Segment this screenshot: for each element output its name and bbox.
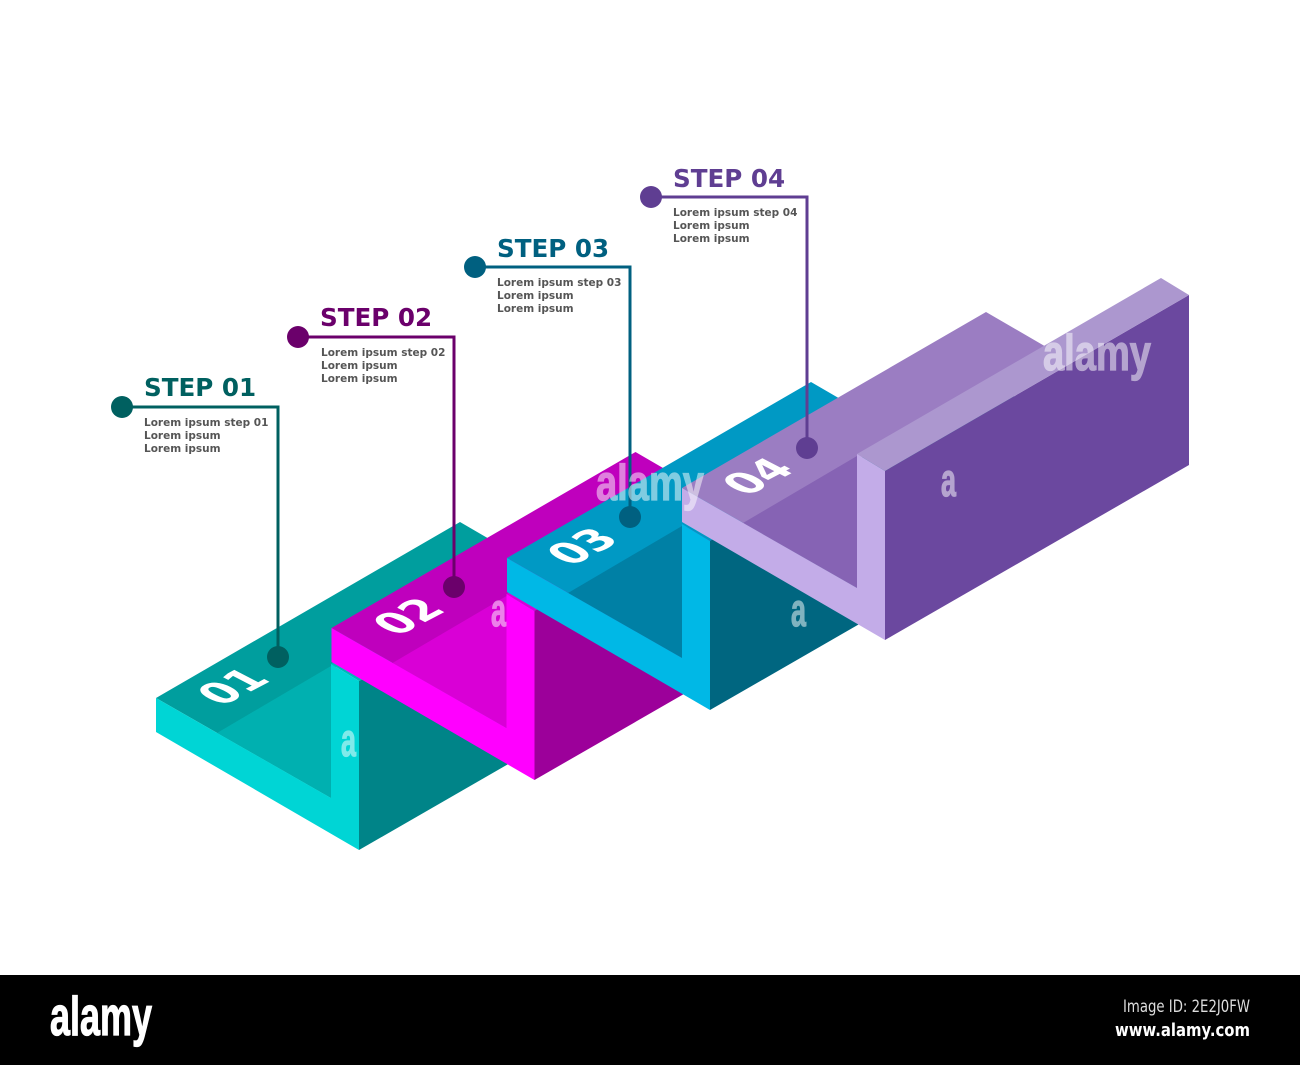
leader: step 02 [287, 326, 465, 598]
number 03: 03 [535, 522, 632, 572]
watermarks: alamy [1043, 325, 1151, 381]
block: step 03 [507, 348, 1014, 710]
text: step 04: Lorem ipsum step 04 [673, 207, 797, 219]
text: step 02: Lorem ipsum [321, 373, 398, 385]
watermarks: alamy [596, 455, 704, 511]
text: step 02: STEP 02 [320, 303, 432, 332]
text: step 04: STEP 04 [673, 164, 785, 193]
text: step 01: Lorem ipsum [144, 430, 221, 442]
text: step 02: Lorem ipsum step 02 [321, 347, 445, 359]
text: step 01 [144, 373, 268, 455]
block: step 02 [332, 418, 838, 780]
footer logo: alamy [50, 985, 152, 1047]
number 01: 01 [185, 662, 282, 712]
watermarks: a [941, 454, 956, 506]
text: step 04: Lorem ipsum [673, 233, 750, 245]
watermarks: a [341, 714, 356, 766]
footer bar [0, 975, 1300, 1065]
text: step 03: Lorem ipsum [497, 303, 574, 315]
text: step 03: Lorem ipsum [497, 290, 574, 302]
block: step 04 [682, 278, 1189, 640]
number 02: 02 [361, 592, 458, 642]
text: step 03: Lorem ipsum step 03 [497, 277, 621, 289]
text: step 04: Lorem ipsum [673, 220, 750, 232]
website: www.alamy.com [1115, 1020, 1250, 1041]
leader: step 04 [640, 186, 818, 459]
image id: Image ID: 2E2J0FW [1123, 997, 1250, 1017]
text: step 01: STEP 01 [144, 373, 256, 402]
text: step 02 [320, 303, 445, 385]
leader: step 01 [111, 396, 289, 668]
text: step 04 [673, 164, 797, 245]
watermarks: a [791, 584, 806, 636]
text: step 03: STEP 03 [497, 234, 609, 263]
number 04: 04 [710, 452, 807, 502]
text: step 01: Lorem ipsum step 01 [144, 417, 268, 429]
text: step 01: Lorem ipsum [144, 443, 221, 455]
block: step 01 [156, 488, 663, 850]
text: step 02: Lorem ipsum [321, 360, 398, 372]
watermarks [341, 325, 1151, 766]
leader: step 03 [464, 256, 641, 528]
watermarks: a [491, 584, 506, 636]
text: step 03 [497, 234, 621, 315]
